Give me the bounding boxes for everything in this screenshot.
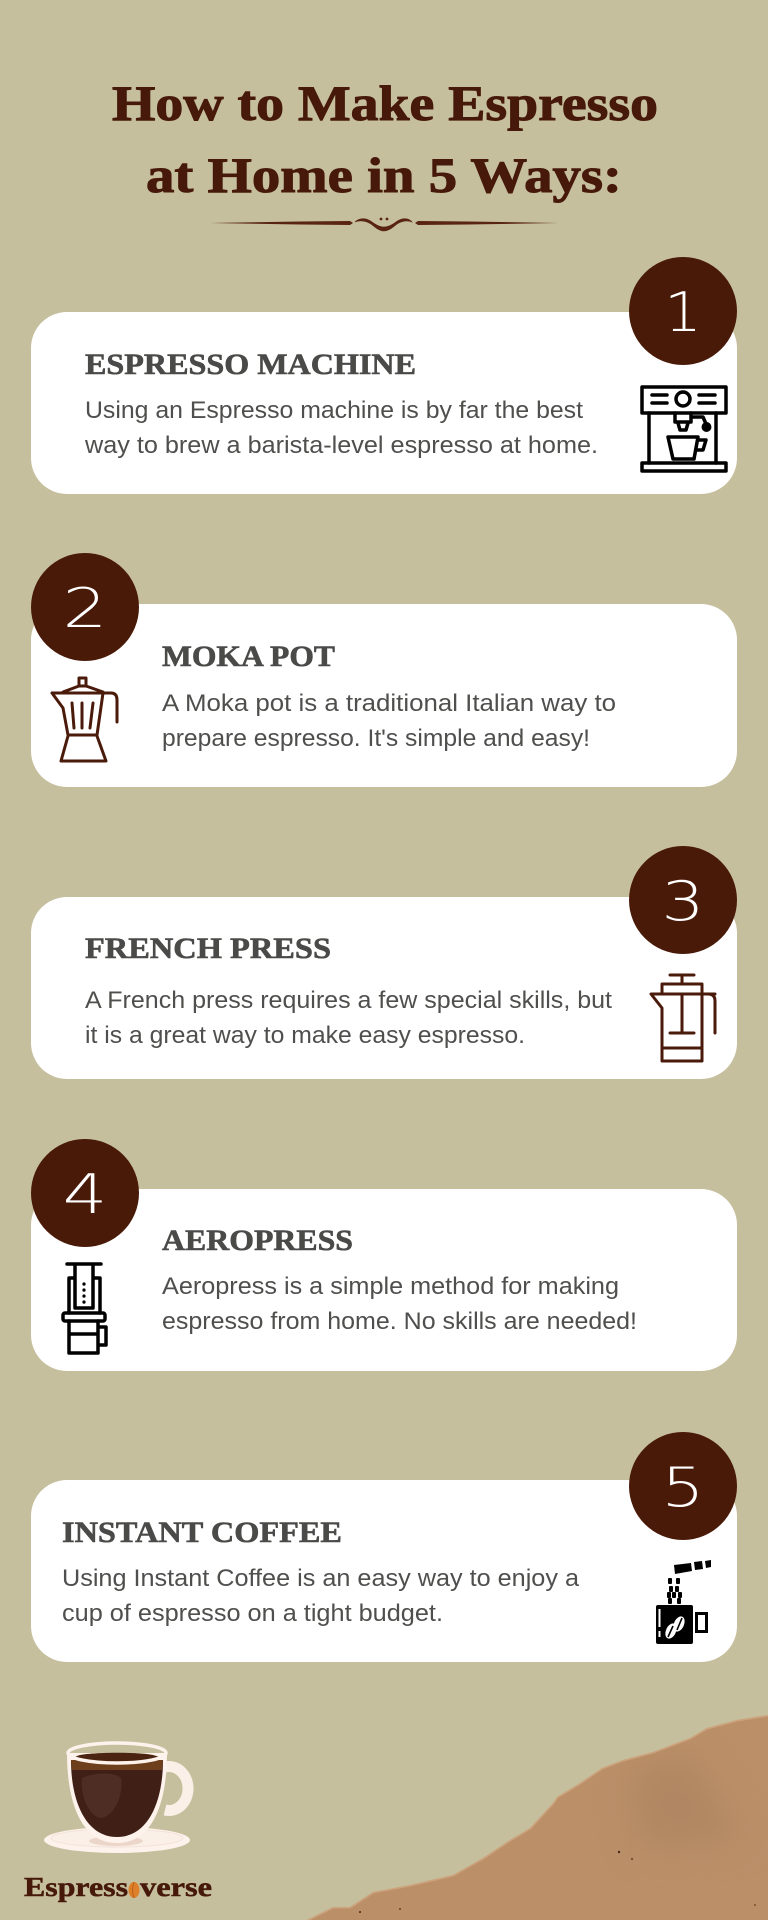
description: espresso machine xyxy=(84,397,598,459)
number badge 5 xyxy=(629,1432,737,1540)
panel: aeropress xyxy=(31,1139,737,1371)
description: moka pot: A Moka pot is a traditional Italian way to xyxy=(162,690,616,717)
panel: moka pot xyxy=(31,553,737,787)
panel: espresso machine xyxy=(31,257,737,494)
description: aeropress: Aeropress is a simple method for making xyxy=(162,1273,619,1300)
icon: espresso machine xyxy=(642,387,726,471)
icon: french press xyxy=(651,975,715,1061)
description: instant coffee xyxy=(62,1565,580,1627)
number badge 2: 2 xyxy=(63,577,107,640)
title xyxy=(112,75,658,203)
torn kraft paper corner xyxy=(307,1715,768,1920)
panel: instant coffee xyxy=(31,1432,737,1662)
logo: coffee cup xyxy=(44,1743,190,1853)
icon: aeropress xyxy=(63,1264,106,1353)
number badge 3: 3 xyxy=(662,871,704,933)
description: french press xyxy=(85,987,612,1049)
number badge 3 xyxy=(629,846,737,954)
description: aeropress: espresso from home. No skills are needed! xyxy=(162,1308,637,1335)
number badge 2 xyxy=(31,553,139,661)
number badge 4 xyxy=(31,1139,139,1247)
heading: french press: FRENCH PRESS xyxy=(85,932,331,965)
number badge 1 xyxy=(629,257,737,365)
description: moka pot xyxy=(162,690,616,752)
icon: instant coffee xyxy=(656,1560,711,1644)
description: instant coffee: Using Instant Coffee is an easy way to enjoy a xyxy=(62,1565,580,1592)
number badge 1: 1 xyxy=(664,282,702,344)
description: instant coffee: cup of espresso on a tight budget. xyxy=(62,1600,443,1627)
logo: wordmark: Espress xyxy=(24,1872,128,1902)
icon: coffee bean xyxy=(128,1882,140,1898)
icon: moka pot xyxy=(52,678,117,761)
description: aeropress xyxy=(162,1273,637,1335)
heading: instant coffee: INSTANT COFFEE xyxy=(62,1516,342,1549)
heading: aeropress: AEROPRESS xyxy=(162,1224,353,1257)
title ornament divider xyxy=(210,218,558,231)
heading: espresso machine: ESPRESSO MACHINE xyxy=(85,348,416,381)
title: at Home in 5 Ways: xyxy=(146,147,622,203)
heading: moka pot: MOKA POT xyxy=(162,640,335,673)
panel: french press xyxy=(31,846,737,1079)
title: How to Make Espresso xyxy=(112,75,658,131)
description: moka pot: prepare espresso. It's simple and easy! xyxy=(162,725,590,752)
description: french press: A French press requires a few special skills, but xyxy=(85,987,612,1014)
logo: wordmark xyxy=(24,1872,212,1902)
description: espresso machine: way to brew a barista-level espresso at home. xyxy=(84,432,598,459)
number badge 4: 4 xyxy=(63,1163,107,1226)
description: french press: it is a great way to make easy espresso. xyxy=(85,1022,525,1049)
logo: wordmark: verse xyxy=(140,1872,212,1902)
description: espresso machine: Using an Espresso machine is by far the best xyxy=(85,397,583,424)
number badge 5: 5 xyxy=(662,1457,704,1519)
